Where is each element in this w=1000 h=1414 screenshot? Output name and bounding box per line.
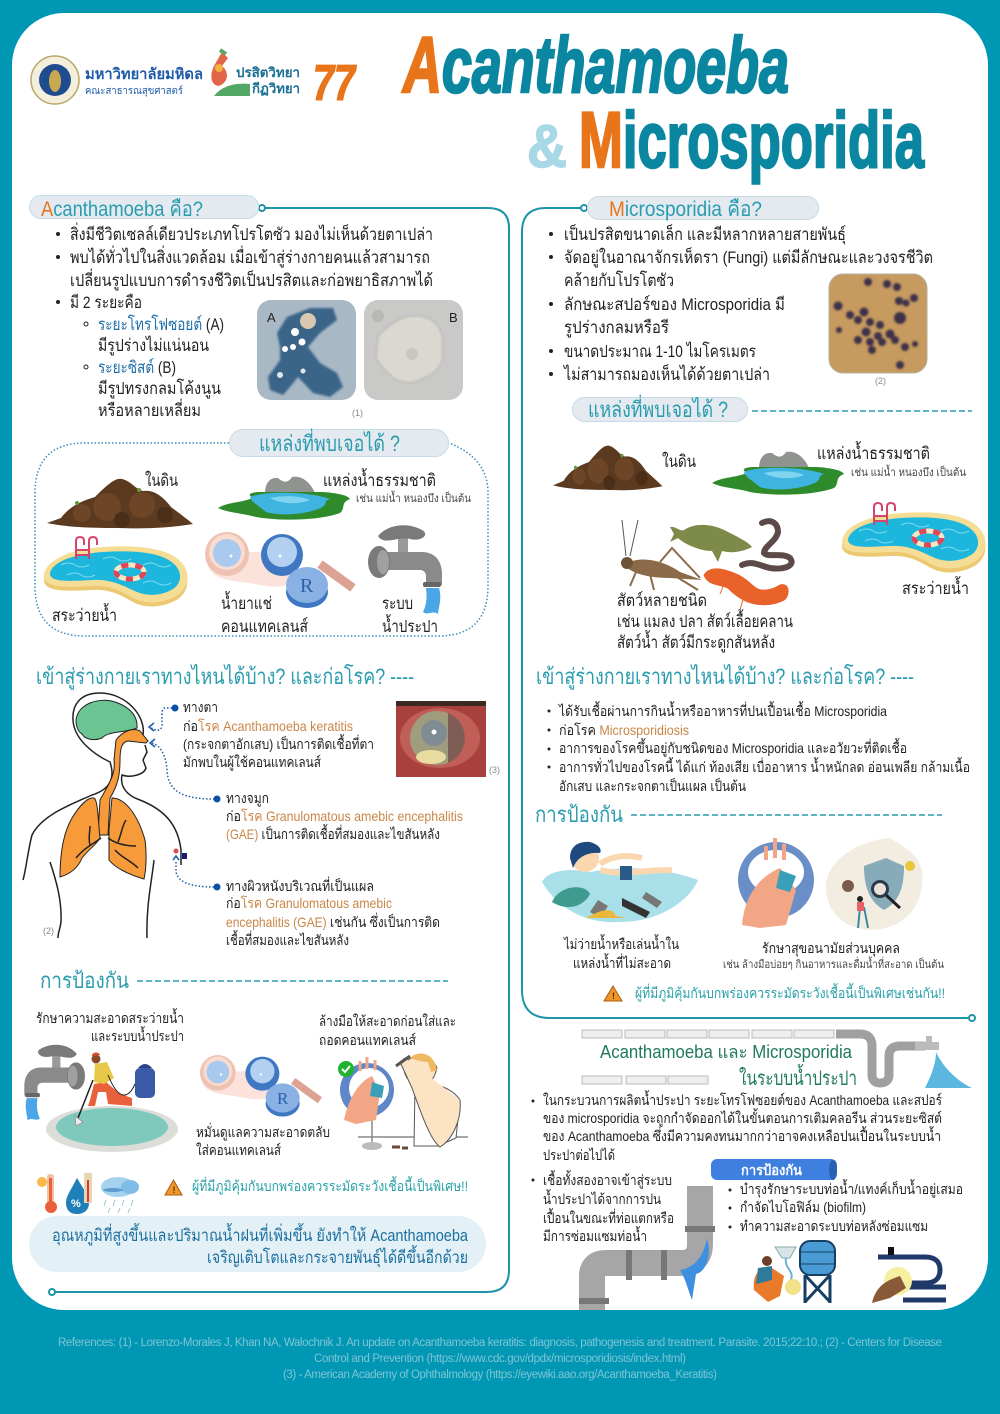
references xyxy=(58,1337,942,1381)
credit: (2) xyxy=(43,926,54,936)
title line: Acanthamoeba: Acanthamoeba xyxy=(402,20,789,109)
photo: trophozoite A: A xyxy=(267,310,276,325)
icon: snake xyxy=(742,521,792,569)
logo: parasitology department xyxy=(211,50,300,97)
bullet list: มี 2 ระยะคือ xyxy=(70,293,142,312)
prevention: lens case: หมั่นดูแลความสะอาดตลับ xyxy=(196,1123,330,1141)
text: skin route: ทางผิวหนังบริเวณที่เป็นแผล xyxy=(226,877,374,894)
bullet list xyxy=(56,222,433,420)
paragraph: contamination: เปื้อนในขณะที่ท่อแตกหรือ xyxy=(543,1208,674,1226)
illustration: pool cleaner xyxy=(46,1052,178,1152)
warning note (left) xyxy=(165,1176,468,1195)
bullet list: หรือหลายเหลี่ยม xyxy=(98,398,201,420)
habitat: soil: ในดิน xyxy=(145,470,178,490)
photo: microsporidia spores xyxy=(829,274,927,373)
caption: ถอดคอนแทคเลนส์ xyxy=(319,1032,416,1048)
heading pill: Acanthamoeba คือ? xyxy=(41,198,203,221)
text: skin route xyxy=(226,877,440,948)
caption: สัตว์หลายชนิด xyxy=(617,591,707,610)
heading pill: Microsporidia คือ? xyxy=(609,198,762,221)
paragraph: treatment: ประปาต่อไปได้ xyxy=(543,1147,615,1163)
heading: prevention (Acanthamoeba): การป้องกัน xyxy=(40,968,129,993)
climate callout: เจริญเติบโตและกระจายพันธุ์ได้ดีขึ้นอีกด้วย xyxy=(207,1245,468,1268)
icon: washing hands xyxy=(738,838,814,928)
prevention: pool and tap xyxy=(24,1008,184,1152)
bullet list: ไม่สามารถมองเห็นได้ด้วยตาเปล่า xyxy=(562,363,770,384)
text: nose route: ก่อโรค Granulomatous amebic encephalitis xyxy=(226,808,463,824)
bullet list: ขนาดประมาณ 1-10 ไมโครเมตร xyxy=(564,341,756,361)
paragraph: contamination: เชื้อทั้งสองอาจเข้าสู่ระบบ xyxy=(543,1170,672,1189)
route: skin connector xyxy=(173,848,220,890)
heading: Acanthamoeba และ Microsporidia xyxy=(600,1042,853,1062)
illustration: swimmer in polluted water xyxy=(542,842,698,922)
logo: 77: 77 xyxy=(313,55,357,111)
bullet list: รูปร่างกลมหรือรี xyxy=(564,318,669,338)
bronchi xyxy=(76,820,138,868)
logo: Mahidol seal xyxy=(31,56,79,104)
illustration: top pipes xyxy=(582,1030,972,1088)
prevention: lens case: R xyxy=(277,1089,289,1108)
photo credit: (1) xyxy=(352,408,363,418)
illustration: shield and magnifier xyxy=(826,838,923,930)
head and torso outline xyxy=(23,693,181,938)
text: eye route: ก่อโรค Acanthamoeba keratitis xyxy=(183,718,353,734)
title ampersand: & xyxy=(527,113,567,180)
photo credit: (3) xyxy=(489,765,500,775)
habitat: contact lens solution: น้ำยาแช่ xyxy=(221,591,272,613)
heading pill: แหล่งที่พบเจอได้ ? xyxy=(588,394,728,422)
habitat: soil: ในดิน xyxy=(662,451,696,471)
paragraph: treatment: ของ Acanthamoeba ซึ่งมีความคงทนมากกว่าอาจคงเหลือปนเปื้อนในระบบน้ำ xyxy=(543,1126,941,1144)
references: References: (1) - Lorenzo-Morales J, Khan NA, Walochnik J. An update on Acanthamoeba keratitis: diagnosis, pathogenesis and treatment. Parasite. 2015;22:10.; (2) - Centers for Disease xyxy=(58,1337,942,1349)
photo: cyst B xyxy=(364,300,463,400)
heading: routes of entry (Microsporidia): เข้าสู่ร่างกายเราทางไหนได้บ้าง? และก่อโรค? ---- xyxy=(536,664,914,690)
photo: cyst B: B xyxy=(449,310,458,325)
references: (3) - American Academy of Ophthalmology (https://eyewiki.aao.org/Acanthamoeba_Keratitis) xyxy=(283,1369,717,1381)
caption: แหล่งน้ำที่ไม่สะอาด xyxy=(573,953,671,971)
prevention: avoid dirty water xyxy=(542,842,698,971)
habitat: natural water: แหล่งน้ำธรรมชาติ xyxy=(323,468,436,490)
logo: parasitology department: ปรสิตวิทยา xyxy=(236,65,300,80)
paragraph: contamination: น้ำประปาได้จากการปน xyxy=(543,1189,661,1207)
list: Microsporidia infection: อาการของโรคขึ้นอยู่กับชนิดของ Microsporidia และอวัยวะที่ติดเชื้อ xyxy=(559,738,907,757)
route: eye connector xyxy=(149,704,178,731)
caption xyxy=(319,1013,456,1048)
icons: temperature, humidity, rain xyxy=(37,1173,139,1214)
airway xyxy=(98,730,148,835)
paragraph: treatment: ของ microsporidia จะถูกกำจัดออกได้ในขั้นตอนการเติมคลอรีน ส่วนระยะซิสต์ xyxy=(543,1108,942,1127)
illustration: man with contact lens xyxy=(392,1054,460,1148)
right lung xyxy=(109,798,146,879)
references: Control and Prevention (https://www.cdc.gov/dpdx/microsporidiosis/index.html) xyxy=(314,1353,686,1365)
list: prevention: บำรุงรักษาระบบท่อน้ำ/แทงค์เก็บน้ำอยู่เสมอ xyxy=(740,1179,963,1198)
list: prevention: ทำความสะอาดระบบท่อหลังซ่อมแซม xyxy=(740,1218,928,1234)
caption xyxy=(36,1008,184,1044)
heading: prevention (Microsporidia): การป้องกัน xyxy=(535,802,623,827)
panel: Acanthamoeba frame line xyxy=(49,205,509,1295)
habitat: soil xyxy=(47,470,193,528)
warning note (left): ผู้ที่มีภูมิคุ้มกันบกพร่องควรระมัดระวังเชื้อนี้เป็นพิเศษ!! xyxy=(192,1176,468,1195)
heading xyxy=(600,1042,857,1090)
text: nose route: (GAE) เป็นการติดเชื้อที่สมองและไขสันหลัง xyxy=(226,824,440,842)
prevention: wash hands xyxy=(319,1013,468,1150)
habitat: swimming pool xyxy=(842,503,985,598)
list: Microsporidia infection: ก่อโรค Microsporidiosis xyxy=(559,722,689,738)
text: skin route: ก่อโรค Granulomatous amebic xyxy=(226,895,392,911)
caption: เช่น แมลง ปลา สัตว์เลื้อยคลาน xyxy=(617,609,793,631)
icon: cricket xyxy=(621,520,702,590)
habitat: tap water xyxy=(368,525,442,636)
photo credit: (2) xyxy=(875,376,886,386)
heading pill xyxy=(572,394,972,422)
banner: prevention pipe xyxy=(711,1159,837,1180)
habitat: natural water xyxy=(712,441,966,495)
bullet list: ลักษณะสปอร์ของ Microsporidia มี xyxy=(564,295,785,314)
habitat: contact lens solution xyxy=(205,532,353,636)
prevention: lens case xyxy=(196,1055,330,1158)
heading pill: แหล่งที่พบเจอได้ ? xyxy=(259,428,400,456)
text: eye route: (กระจกตาอักเสบ) เป็นการติดเชื้อที่ตา xyxy=(183,734,374,752)
heading: ในระบบน้ำประปา xyxy=(739,1064,857,1090)
panel: Microsporidia frame line xyxy=(522,205,975,1021)
habitat: animals xyxy=(617,520,793,653)
bullet list: มีรูปทรงกลมโค้งนูน xyxy=(98,378,221,399)
bullet list: เป็นปรสิตขนาดเล็ก และมีหลากหลายสายพันธุ์ xyxy=(564,223,846,245)
habitat: soil xyxy=(553,446,696,490)
illustration: leaking pipe xyxy=(579,1186,715,1310)
habitat: contact lens solution: R xyxy=(300,575,314,597)
caption: รักษาความสะอาดสระว่ายน้ำ xyxy=(36,1008,184,1026)
paragraph: treatment: ในกระบวนการผลิตน้ำประปา ระยะโทรโฟซอยต์ของ Acanthamoeba และสปอร์ xyxy=(543,1090,942,1108)
photo: trophozoite A xyxy=(257,300,356,400)
brain xyxy=(76,700,137,740)
bullet list xyxy=(549,223,933,384)
paragraph: contamination xyxy=(532,1170,674,1244)
icon: humidity drop: % xyxy=(71,1198,81,1210)
caption xyxy=(563,934,679,971)
warning note (left): ! xyxy=(172,1185,176,1195)
list: prevention xyxy=(728,1179,963,1234)
climate callout xyxy=(29,1216,486,1272)
habitat: natural water xyxy=(218,468,471,520)
caption: เช่น ล้างมือบ่อยๆ กินอาหารและดื่มน้ำที่สะอาด เป็นต้น xyxy=(723,956,944,971)
icon: rain cloud xyxy=(101,1177,139,1213)
icon: fish xyxy=(670,525,752,562)
text: eye route: ทางตา xyxy=(183,699,218,715)
caption xyxy=(617,591,793,653)
caption: สัตว์น้ำ สัตว์มีกระดูกสันหลัง xyxy=(617,630,775,653)
heading pill xyxy=(588,196,818,221)
icon: thermometer xyxy=(37,1174,57,1213)
text: nose route xyxy=(226,790,463,842)
panel: what is Acanthamoeba xyxy=(30,196,463,420)
habitat: natural water: เช่น แม่น้ำ หนองบึง เป็นต้น xyxy=(356,490,471,505)
caption: รักษาสุขอนามัยส่วนบุคคล xyxy=(762,940,900,957)
university name: คณะสาธารณสุขศาสตร์ xyxy=(85,85,184,97)
body diagram xyxy=(23,693,181,938)
habitat: natural water: แหล่งน้ำธรรมชาติ xyxy=(817,441,930,463)
bullet list: จัดอยู่ในอาณาจักรเห็ดรา (Fungi) แต่มีลักษณะและวงจรชีวิต xyxy=(564,246,933,268)
habitat: swimming pool: สระว่ายน้ำ xyxy=(902,576,969,598)
paragraph: contamination: มีการซ่อมแซมท่อน้ำ xyxy=(543,1226,647,1244)
prevention: lens case: ใส่คอนแทคเลนส์ xyxy=(196,1142,281,1158)
bullet list: สิ่งมีชีวิตเซลล์เดียวประเภทโปรโตซัว มองไม่เห็นด้วยตาเปล่า xyxy=(70,222,433,244)
title xyxy=(402,20,925,184)
panel: what is Microsporidia xyxy=(549,196,933,386)
habitat: natural water: เช่น แม่น้ำ หนองบึง เป็นต้น xyxy=(851,464,966,479)
left lung xyxy=(60,798,100,877)
list: Microsporidia infection: อักเสบ และกระจกตาเป็นแผล เป็นต้น xyxy=(559,777,746,794)
heading pill xyxy=(230,428,448,456)
caption: และระบบน้ำประปา xyxy=(91,1026,184,1044)
panel: habitats of Microsporidia xyxy=(553,394,985,653)
list: prevention: กำจัดไบโอฟิล์ม (biofilm) xyxy=(740,1199,866,1215)
university name xyxy=(85,65,203,97)
warning note (right): ผู้ที่มีภูมิคุ้มกันบกพร่องควรระมัดระวังเชื้อนี้เป็นพิเศษเช่นกัน!! xyxy=(635,983,945,1002)
icon: faucet xyxy=(24,1045,85,1120)
logo: parasitology department: กีฏวิทยา xyxy=(252,81,300,97)
route connectors xyxy=(149,704,220,890)
paragraph: treatment xyxy=(532,1090,942,1163)
text: nose route: ทางจมูก xyxy=(226,790,269,807)
university name: มหาวิทยาลัยมหิดล xyxy=(85,65,203,83)
habitat: swimming pool: สระว่ายน้ำ xyxy=(52,603,117,625)
prevention: personal hygiene xyxy=(723,838,944,971)
illustration: cleaning pipes xyxy=(872,1247,946,1303)
panel: in tap water xyxy=(532,1030,972,1310)
habitat: swimming pool xyxy=(44,537,187,625)
caption: ล้างมือให้สะอาดก่อนใส่และ xyxy=(319,1013,456,1029)
dotted frame xyxy=(35,443,488,636)
heading: routes of entry: เข้าสู่ร่างกายเราทางไหนได้บ้าง? และก่อโรค? ---- xyxy=(36,664,414,690)
icon: salamander xyxy=(704,569,788,610)
photo: infected eye xyxy=(396,701,486,777)
text: skin route: encephalitis (GAE) เช่นกัน ซึ่งเป็นการติด xyxy=(226,913,440,930)
caption: ไม่ว่ายน้ำหรือเล่นน้ำใน xyxy=(563,934,679,952)
habitat: tap water: น้ำประปา xyxy=(382,614,438,636)
bullet list: ระยะโทรโฟซอยต์ (A) xyxy=(98,314,224,334)
panel: habitats of Acanthamoeba xyxy=(35,428,488,636)
climate callout: อุณหภูมิที่สูงขึ้นและปริมาณน้ำฝนที่เพิ่มขึ้น ยังทำให้ Acanthamoeba xyxy=(52,1223,468,1246)
caption xyxy=(723,940,944,971)
icon: washing hands xyxy=(338,1057,394,1150)
illustration: water tank and technician xyxy=(754,1241,835,1303)
header logos xyxy=(31,50,357,111)
route: nose connector xyxy=(150,739,220,802)
list: Microsporidia infection: ได้รับเชื้อผ่านการกินน้ำหรืออาหารที่ปนเปื้อนเชื้อ Microsporidia xyxy=(558,701,887,719)
bullet list: เปลี่ยนรูปแบบการดำรงชีวิตเป็นปรสิตและก่อพยาธิสภาพได้ xyxy=(70,268,433,291)
illustration: mirror stand xyxy=(358,1118,468,1144)
text: eye route: มักพบในผู้ใช้คอนแทคเลนส์ xyxy=(183,754,321,771)
bullet list: มีรูปร่างไม่แน่นอน xyxy=(98,335,209,356)
habitat: tap water: ระบบ xyxy=(382,594,413,613)
bullet list: พบได้ทั่วไปในสิ่งแวดล้อม เมื่อเข้าสู่ร่างกายคนแล้วสามารถ xyxy=(70,245,430,268)
text: eye route xyxy=(183,699,374,771)
habitat: contact lens solution: คอนแทคเลนส์ xyxy=(221,617,309,636)
bullet list: คล้ายกับโปรโตซัว xyxy=(564,270,674,290)
warning note (right): ! xyxy=(612,991,615,1001)
bullet list: ระยะซิสต์ (B) xyxy=(98,358,176,377)
warning note (right) xyxy=(604,983,945,1002)
banner: prevention pipe: การป้องกัน xyxy=(741,1162,802,1178)
list: Microsporidia infection xyxy=(548,701,970,794)
text: skin route: เชื้อที่สมองและไขสันหลัง xyxy=(226,930,349,948)
